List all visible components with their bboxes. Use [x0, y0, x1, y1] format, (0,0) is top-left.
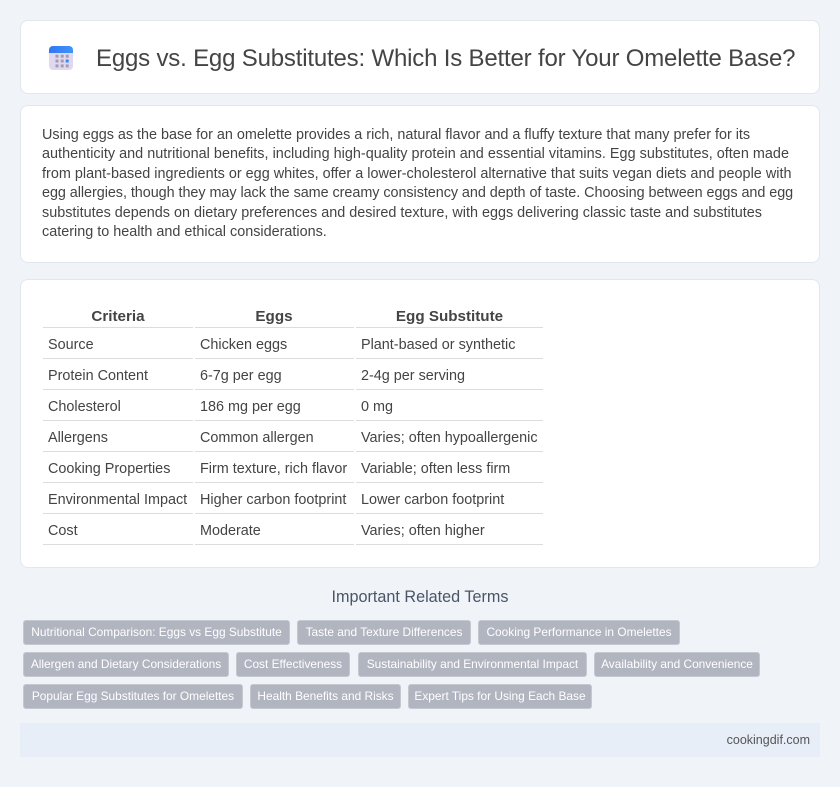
table header — [91, 308, 503, 325]
tag: Availability and Convenience — [601, 657, 753, 671]
panel: related term tags — [23, 620, 760, 709]
row: allergens: Varies; often hypoallergenic — [361, 430, 538, 446]
footer — [20, 723, 820, 757]
tag: Expert Tips for Using Each Base — [414, 689, 586, 703]
table header: Criteria — [91, 308, 145, 325]
row: environmental impact: Higher carbon footprint — [200, 492, 346, 508]
text block: introduction: egg allergies, though they may lack the same creamy consistency and depth of taste. Choosing between eggs and egg — [42, 185, 793, 201]
icon: calendar — [49, 46, 73, 70]
panel: comparison table — [20, 279, 820, 568]
row: cholesterol: 0 mg — [361, 399, 393, 415]
row: cholesterol: 186 mg per egg — [200, 399, 301, 415]
tag — [23, 652, 229, 677]
row: cost: Varies; often higher — [361, 523, 485, 539]
row: environmental impact: Lower carbon footprint — [361, 492, 504, 508]
table header: Egg Substitute — [396, 308, 503, 325]
comparison table — [43, 308, 543, 545]
tag: Nutritional Comparison: Eggs vs Egg Substitute — [31, 625, 282, 639]
row: protein content: Protein Content — [48, 368, 148, 384]
row: environmental impact: Environmental Impact — [48, 492, 187, 508]
tag — [250, 684, 401, 709]
title: Eggs vs. Egg Substitutes: Which Is Better for Your Omelette Base? — [96, 45, 795, 72]
tag — [236, 652, 350, 677]
text block: introduction: catering to health and ethical considerations. — [42, 224, 327, 240]
row: protein content — [48, 368, 465, 384]
row: cost: Cost — [48, 523, 78, 539]
tag: Allergen and Dietary Considerations — [31, 657, 221, 671]
row: cooking properties — [48, 461, 510, 477]
row: allergens: Common allergen — [200, 430, 314, 446]
heading: important related terms: Important Related Terms — [332, 588, 508, 606]
tag — [358, 652, 587, 677]
row: cholesterol: Cholesterol — [48, 399, 121, 415]
row: protein content: 6-7g per egg — [200, 368, 282, 384]
row: source: Plant-based or synthetic — [361, 337, 515, 353]
tag — [23, 620, 290, 645]
text block: introduction: from plant-based ingredients or egg whites, offer a lower-cholesterol alternative that suits vegan diets and people with — [42, 166, 791, 182]
text block: introduction — [42, 127, 793, 240]
footer source text: cookingdif.com — [727, 733, 810, 747]
tag — [408, 684, 592, 709]
row: cooking properties: Variable; often less firm — [361, 461, 510, 477]
row: cooking properties: Cooking Properties — [48, 461, 170, 477]
panel: header — [20, 20, 820, 94]
row: cooking properties: Firm texture, rich flavor — [200, 461, 347, 477]
row: allergens — [48, 430, 538, 446]
tag: Health Benefits and Risks — [257, 689, 394, 703]
tag: Popular Egg Substitutes for Omelettes — [32, 689, 234, 703]
text block: introduction: authenticity and nutritional benefits, including high-quality protein and essential vitamins. Egg substitutes, often made — [42, 146, 789, 162]
panel: introduction — [20, 105, 820, 263]
text block: introduction: substitutes depends on dietary preferences and desired texture, with eggs delivering classic taste and substitutes — [42, 205, 762, 221]
row: source — [48, 337, 515, 353]
row: source: Source — [48, 337, 94, 353]
tag: Cooking Performance in Omelettes — [486, 625, 672, 639]
row: protein content: 2-4g per serving — [361, 368, 465, 384]
tag: Cost Effectiveness — [244, 657, 342, 671]
text block: introduction: Using eggs as the base for an omelette provides a rich, natural flavor and a fluffy texture that many prefer for its — [42, 127, 750, 143]
tag: Taste and Texture Differences — [306, 625, 462, 639]
row: source: Chicken eggs — [200, 337, 287, 353]
row: cost: Moderate — [200, 523, 261, 539]
tag — [478, 620, 680, 645]
row: environmental impact — [48, 492, 504, 508]
tag — [23, 684, 243, 709]
row: cost — [48, 523, 485, 539]
row: allergens: Allergens — [48, 430, 108, 446]
tag — [594, 652, 760, 677]
table header: Eggs — [255, 308, 293, 325]
row: cholesterol — [48, 399, 393, 415]
tag: Sustainability and Environmental Impact — [367, 657, 578, 671]
tag — [297, 620, 471, 645]
